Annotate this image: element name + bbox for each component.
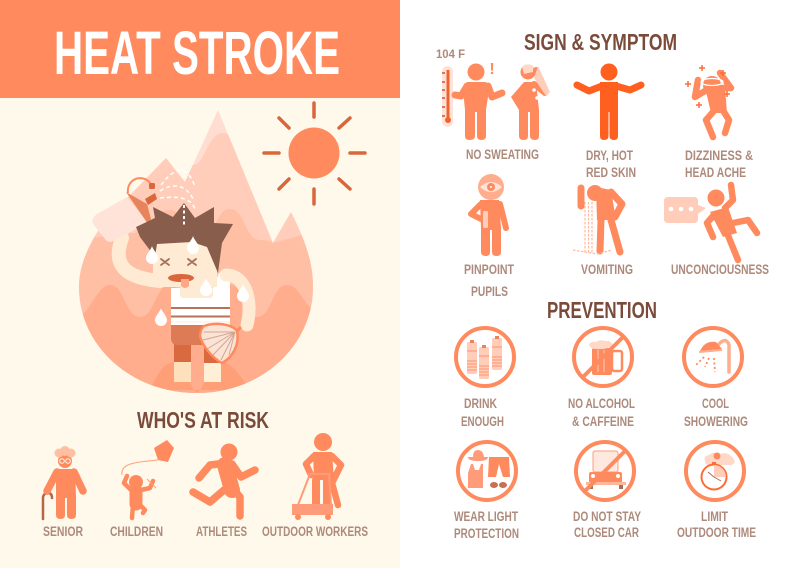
label: protection: PROTECTION (454, 526, 519, 541)
label: dizziness: DIZZINESS & (685, 148, 753, 163)
icon: person wiping sweat (511, 64, 550, 140)
icon: vomiting person (573, 185, 622, 254)
risk item: senior (43, 446, 83, 539)
risk item: athletes (193, 444, 255, 539)
icon: water bottles (456, 328, 514, 386)
symptom: pinpoint pupils (464, 174, 515, 299)
illustration: man cooling off with water (92, 171, 249, 382)
risk item: outdoor workers (262, 433, 368, 539)
icon: sun (264, 103, 365, 204)
label: head ache: HEAD ACHE (685, 165, 746, 180)
icon: person with magnifier over eye (471, 174, 506, 256)
symptom: dry hot red skin (577, 64, 641, 180)
title: HEAT STROKE (54, 19, 340, 87)
exclamation mark: ! (489, 61, 495, 78)
label: do not stay: DO NOT STAY (573, 509, 641, 524)
water on hair (183, 205, 185, 227)
icon: red person (577, 64, 641, 140)
icon: running athlete (193, 444, 255, 516)
illustration: flame background (79, 110, 313, 393)
icon: dizzy person (685, 65, 731, 137)
icon: falling person (707, 185, 757, 260)
icon: clock and clouds (686, 442, 744, 500)
shorts and legs (171, 325, 230, 382)
hand fan (200, 324, 241, 363)
head (153, 240, 217, 287)
icon: light clothes (458, 442, 516, 500)
risk item: children (110, 440, 174, 539)
water stream (160, 171, 195, 209)
label: pupils: PUPILS (471, 284, 508, 299)
water bucket (92, 178, 157, 242)
label: red skin: RED SKIN (586, 165, 636, 180)
label: enough: ENOUGH (461, 414, 504, 429)
label: outdoor time: OUTDOOR TIME (677, 525, 756, 540)
label: no alcohol: NO ALCOHOL (568, 396, 635, 411)
icon: crossed car (576, 442, 634, 500)
label: closed car: CLOSED CAR (574, 525, 639, 540)
prevention: wear light protection (454, 442, 519, 541)
prevention: limit outdoor time (677, 442, 756, 540)
label: showering: SHOWERING (684, 414, 748, 429)
other arm (226, 275, 249, 325)
label: and caffeine: & CAFFEINE (572, 414, 634, 429)
icon: senior (43, 446, 83, 519)
label: unconciousness: UNCONCIOUSNESS (671, 262, 769, 277)
symptom: no sweating (436, 47, 550, 162)
temperature label: 104 F (436, 47, 465, 61)
label: drink: DRINK (464, 396, 497, 411)
label: athletes: ATHLETES (196, 524, 247, 539)
icon: thermometer (442, 66, 453, 127)
label: vomiting: VOMITING (581, 262, 633, 277)
prevention: no alcohol and caffeine (568, 328, 635, 429)
icon: speech bubble (664, 197, 706, 223)
prevention: do not stay in closed car (573, 442, 641, 540)
label: senior: SENIOR (43, 524, 83, 539)
sweat drops (146, 236, 249, 326)
label: limit: LIMIT (701, 509, 729, 524)
heading: who's at risk: WHO'S AT RISK (137, 407, 269, 433)
face (161, 259, 196, 288)
symptom: dizziness and head ache (685, 65, 753, 180)
label: children: CHILDREN (110, 524, 163, 539)
prevention: cool showering (684, 328, 748, 429)
symptom: unconsciousness (664, 185, 769, 277)
title banner (0, 0, 400, 98)
label: dry hot: DRY, HOT (586, 148, 634, 163)
heading: sign and symptom: SIGN & SYMPTOM (524, 29, 677, 55)
icon: worker with cart (292, 433, 341, 520)
label: cool: COOL (702, 396, 729, 411)
icon: crossed beer mug (574, 328, 632, 386)
icon: child with kite (122, 440, 174, 518)
hair (136, 203, 233, 273)
symptom: vomiting (573, 185, 633, 277)
raised arm (119, 238, 160, 281)
icon: shower (684, 328, 742, 386)
label: outdoor workers: OUTDOOR WORKERS (262, 524, 368, 539)
panel: left cream background (0, 0, 400, 568)
label: wear light: WEAR LIGHT (454, 509, 519, 524)
heading: prevention: PREVENTION (547, 297, 657, 323)
panel: right white background (400, 0, 800, 568)
tank top (171, 273, 230, 325)
prevention: drink enough (456, 328, 514, 429)
label: no sweating: NO SWEATING (466, 147, 539, 162)
label: pinpoint: PINPOINT (464, 262, 515, 277)
